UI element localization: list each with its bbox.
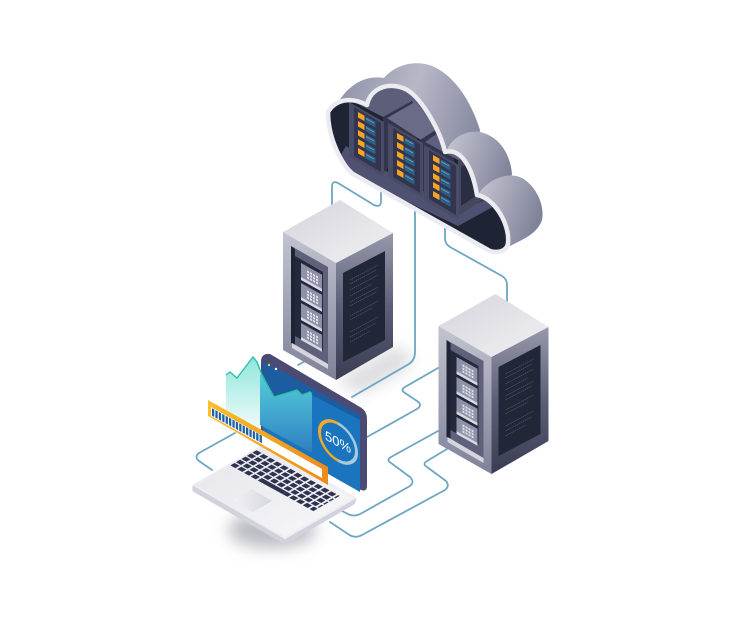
server rack 3 bbox=[424, 134, 483, 226]
cloud rim bbox=[328, 86, 508, 252]
gauge 50%: 50% bbox=[325, 427, 351, 456]
laptop screen bbox=[260, 354, 367, 492]
arch ceiling bbox=[356, 88, 426, 117]
cloud with server racks bbox=[328, 63, 543, 252]
platform under racks bbox=[338, 146, 498, 226]
connection wires bbox=[196, 182, 507, 537]
server rack 1 bbox=[349, 101, 418, 176]
illustration: cloud server network bbox=[192, 63, 548, 557]
cloud interior bbox=[328, 80, 508, 252]
shadow under left server bbox=[336, 347, 412, 395]
laptop shadow bbox=[228, 512, 316, 548]
right server rack bbox=[438, 294, 548, 474]
server rack 2 bbox=[387, 102, 458, 198]
laptop bbox=[193, 354, 367, 548]
chart line bbox=[226, 357, 312, 397]
progress bar bbox=[208, 400, 328, 485]
left server rack bbox=[283, 200, 393, 380]
cloud back lobes bbox=[337, 63, 543, 252]
keyboard bbox=[232, 451, 338, 510]
laptop base bbox=[193, 446, 356, 544]
translucent chart behind screen bbox=[226, 357, 262, 440]
touchpad bbox=[233, 489, 272, 512]
